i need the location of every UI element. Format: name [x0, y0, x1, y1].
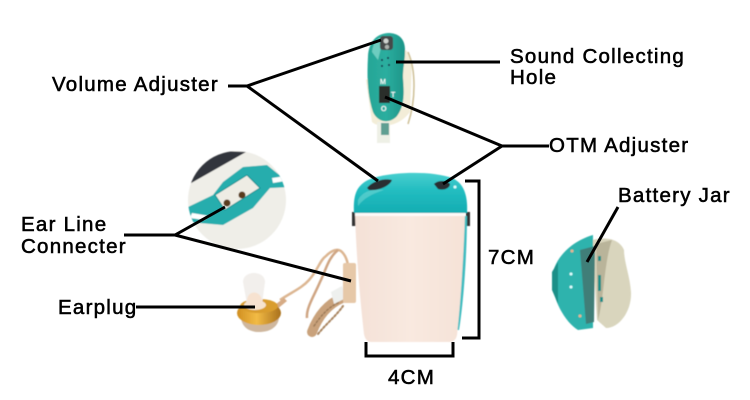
label: Battery Jar: Battery Jar	[618, 184, 731, 207]
icon: top view of device: T	[391, 92, 396, 99]
icon: battery jar view	[552, 235, 631, 330]
dimension bracket: 4CM	[366, 342, 453, 356]
volume wheel	[367, 179, 392, 190]
label: Sound Collecting Hole: Sound Collecting	[510, 45, 685, 68]
icon: earplug and cord	[237, 250, 356, 334]
label: Volume Adjuster: Volume Adjuster	[52, 73, 219, 96]
label: OTM Adjuster: OTM Adjuster	[549, 134, 689, 157]
coiled cord	[312, 298, 343, 334]
icon: top view of device	[366, 33, 414, 143]
icon: main device body	[352, 173, 470, 342]
label: 4CM: 4CM	[388, 366, 435, 389]
icon: top view of device: M	[380, 79, 386, 86]
label: Ear Line Connecter: Ear Line	[21, 213, 107, 236]
icon: top view of device: O	[381, 106, 387, 113]
OTM switch on top	[434, 181, 450, 190]
label: Ear Line Connecter: Connecter	[21, 235, 127, 258]
callout lines	[124, 40, 618, 307]
label: Earplug: Earplug	[58, 296, 137, 319]
connector plug	[331, 286, 346, 304]
label: Sound Collecting Hole: Hole	[510, 66, 557, 89]
label: 7CM: 7CM	[488, 246, 535, 269]
earplug body	[241, 318, 279, 332]
OTM switch	[379, 86, 390, 103]
dimension bracket: 7CM	[462, 181, 479, 338]
icon: ear line connector close-up	[186, 151, 290, 249]
